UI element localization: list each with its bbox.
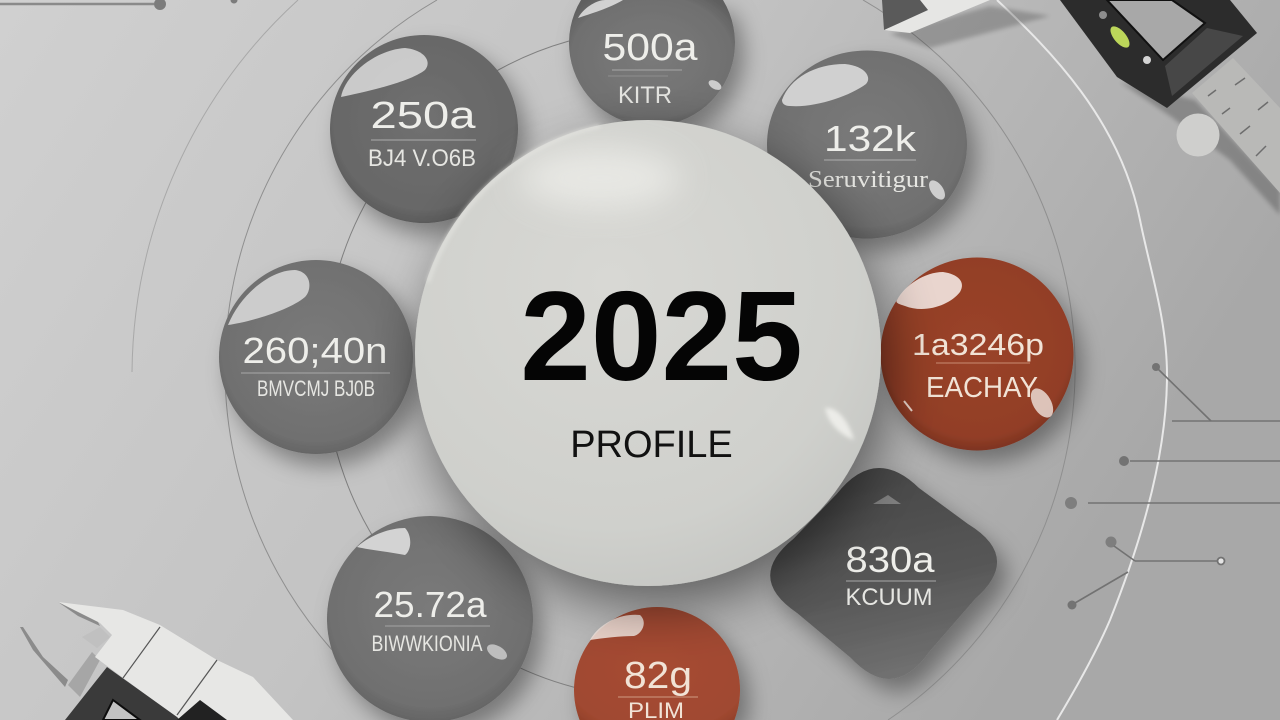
rounded square card: 830a xyxy=(846,539,936,580)
bubble: left xyxy=(219,260,413,454)
caliper jaws xyxy=(20,627,68,687)
bubble: upper left: 250a xyxy=(370,95,477,137)
caliper screen xyxy=(1107,0,1205,60)
caliper white body xyxy=(58,602,293,720)
callout pointers: right side xyxy=(1065,363,1280,610)
bubble: bottom, red xyxy=(574,607,740,720)
bubble: upper left: BJ4 V.O6B xyxy=(368,145,476,172)
bubble: right, red: EACHAY xyxy=(926,372,1038,404)
profile label: PROFILE xyxy=(570,424,733,466)
caliper: bottom left xyxy=(20,602,293,720)
gloss mark xyxy=(825,408,854,440)
bubble: top: 500a xyxy=(602,27,698,69)
bubble: left: 260;40n xyxy=(242,330,388,371)
caliper dark frame xyxy=(65,667,180,720)
callout pointers: top left xyxy=(0,0,238,10)
bubble: top: KITR xyxy=(618,82,672,109)
bubble: upper right: Seruvitigur xyxy=(808,167,928,193)
caliper knob xyxy=(1176,114,1220,156)
caliper jaw xyxy=(884,0,990,33)
bubble: lower left xyxy=(327,516,533,720)
bubble: upper right: 132k xyxy=(824,118,917,159)
bubble: upper left xyxy=(330,35,518,223)
caliper ruler xyxy=(1192,58,1280,193)
rounded square card xyxy=(770,468,997,679)
bubble: upper right xyxy=(767,50,967,238)
caliper body xyxy=(1060,0,1257,108)
bubble: bottom, red: 82g xyxy=(624,655,692,697)
bubble: right, red: 1a3246p xyxy=(912,327,1044,362)
bubble: lower left: BIWWKIONIA xyxy=(372,631,483,656)
bubble: top xyxy=(569,0,735,126)
year heading: 2025 xyxy=(520,265,803,407)
rounded square card: KCUUM xyxy=(846,584,932,611)
caliper green button xyxy=(1107,23,1133,51)
bubble: lower left: 25.72a xyxy=(374,584,488,625)
bubble: left: BMVCMJ BJ0B xyxy=(257,376,375,401)
caliper: top right xyxy=(882,0,1280,215)
central circle xyxy=(415,120,881,586)
bubble: right, red xyxy=(880,258,1074,450)
